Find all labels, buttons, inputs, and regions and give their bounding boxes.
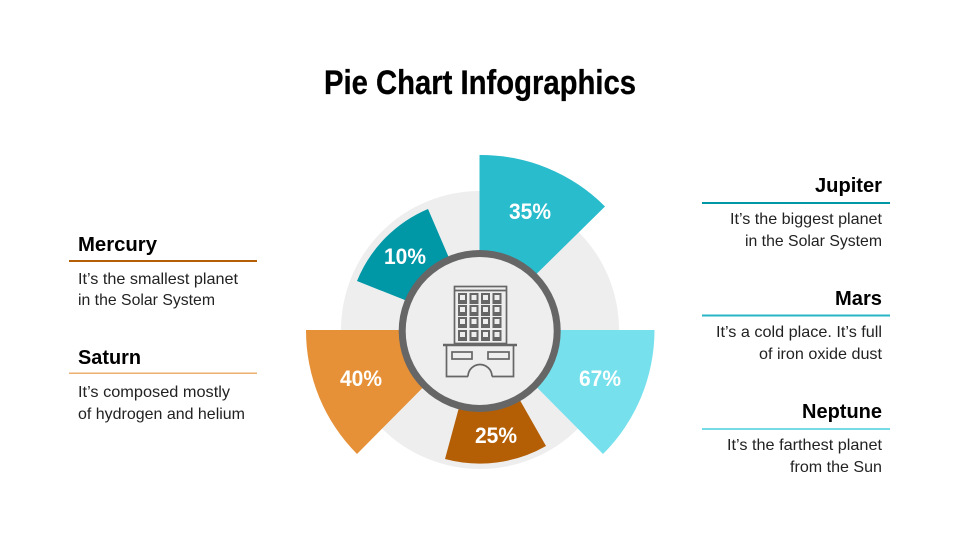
panel: Neptune [702,401,890,476]
text: Mars description: It’s a cold place. It’s full [716,324,882,341]
text: Jupiter description: It’s the biggest planet [730,211,883,228]
title: Pie Chart Infographics [324,64,636,102]
panel: Mercury [69,234,257,309]
icon: building [443,286,517,376]
text: Mars description: of iron oxide dust [759,346,883,363]
panel: Saturn [69,347,257,423]
label: 10%: 10% [384,244,426,269]
text: Mercury description [78,271,239,309]
slice: 10% Mercury [357,209,480,330]
slice: 67% Neptune [480,330,654,454]
heading: Neptune: Neptune [802,401,882,423]
text: Mercury description: It’s the smallest planet [78,271,239,288]
heading: Mercury: Mercury [78,234,158,256]
panel: Jupiter [702,175,890,250]
heading: Jupiter: Jupiter [815,175,882,197]
center ring [402,254,557,408]
text: Jupiter description [730,211,883,250]
background disc [341,191,619,469]
pie chart [306,155,654,469]
slice: 40% Saturn [306,330,480,454]
slice: 35% Jupiter [480,155,605,330]
text: Saturn description: of hydrogen and helium [78,406,245,423]
text: Mercury description: in the Solar System [78,292,215,309]
text: Jupiter description: in the Solar System [745,233,882,250]
panel: Mars [702,288,890,363]
label: 40%: 40% [340,366,382,391]
slice: 25% Mars [445,330,546,464]
label: 35%: 35% [509,199,551,224]
label: 25%: 25% [475,423,517,448]
heading: Saturn: Saturn [78,347,141,369]
text: Saturn description [78,384,245,423]
text: Saturn description: It’s composed mostly [78,384,230,401]
text: Mars description [716,324,883,363]
text: Neptune description: from the Sun [790,459,882,476]
text: Neptune description [727,437,883,476]
label: 67%: 67% [579,366,621,391]
text: Neptune description: It’s the farthest planet [727,437,883,454]
heading: Mars: Mars [835,288,882,310]
